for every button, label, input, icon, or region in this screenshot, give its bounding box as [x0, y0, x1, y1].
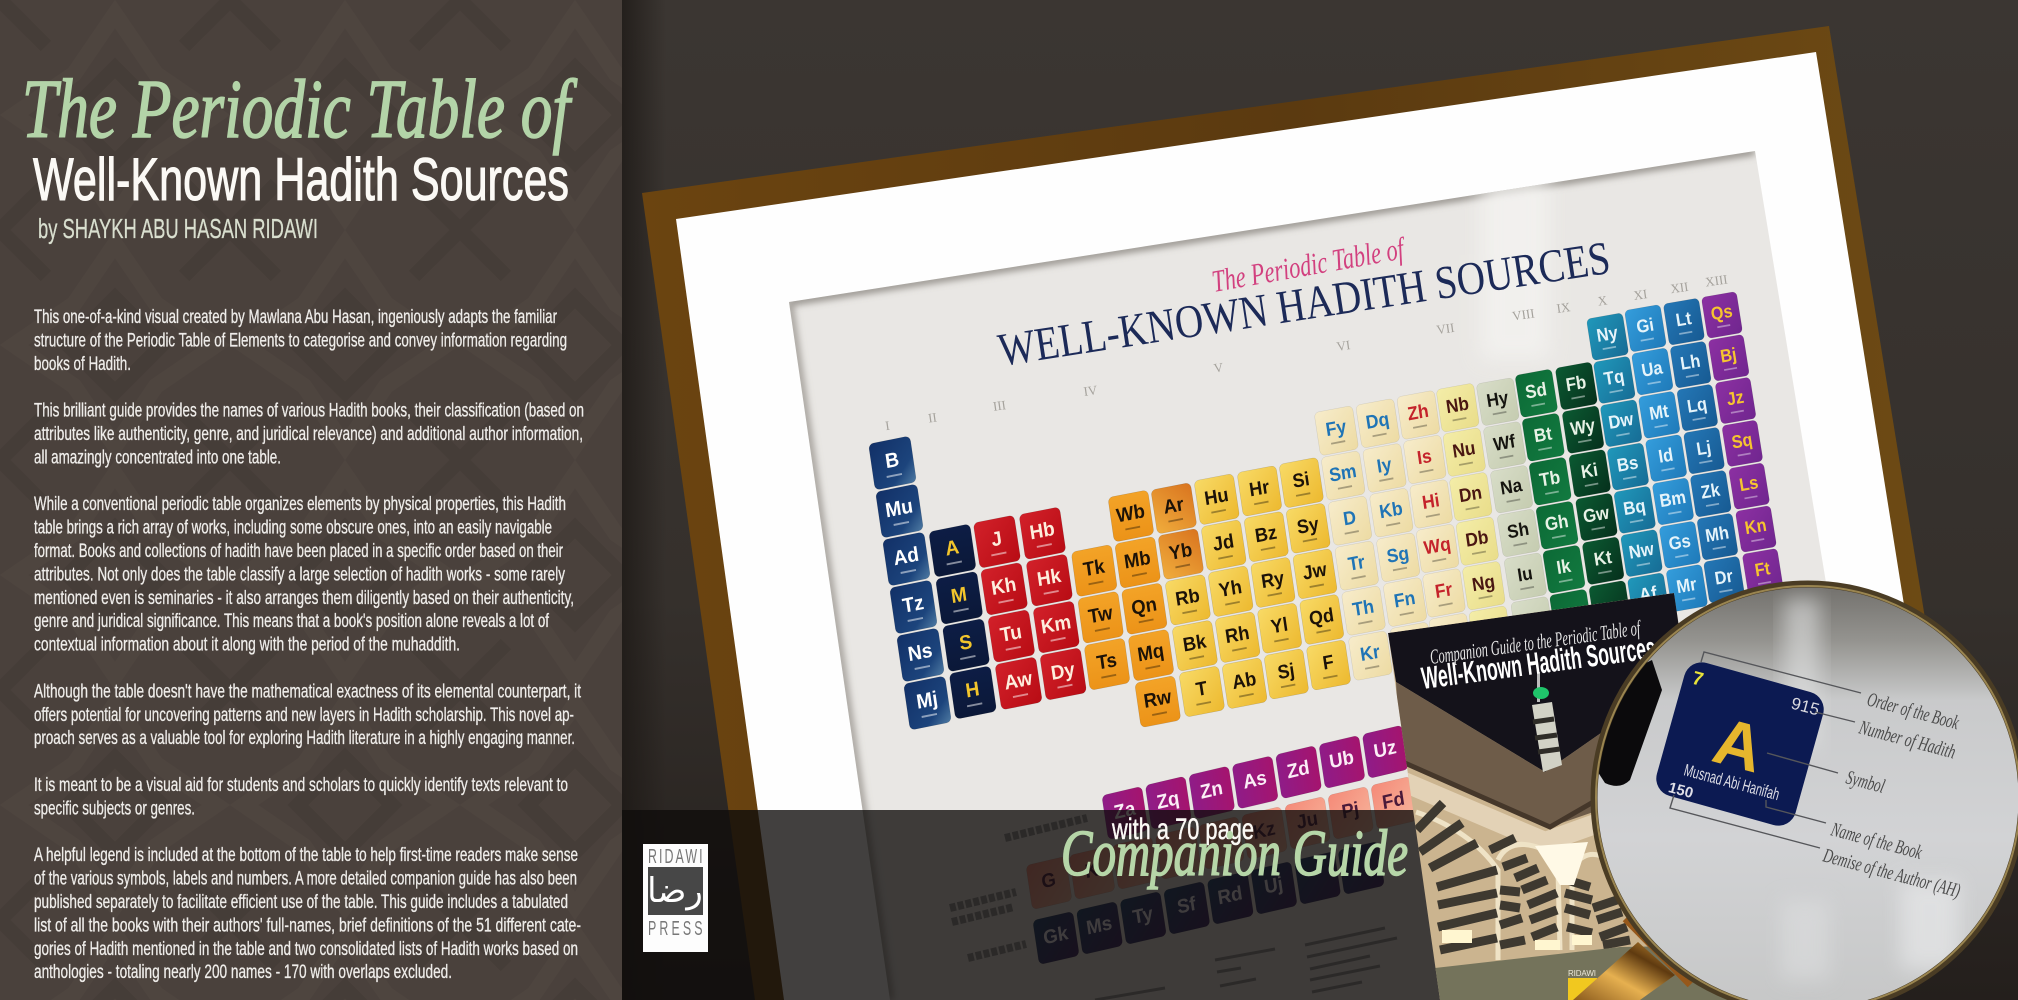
column numerals: VIII: [1511, 306, 1536, 324]
tile column XIX: Gi: [1635, 314, 1655, 337]
tile column II: M: [950, 583, 968, 608]
text block: description paragraphs: published separately to facilitate efficient use of the table. This guide includes a tabulated: [34, 891, 568, 913]
tile column XXI: Bj: [1719, 343, 1738, 367]
tile column X: F: [1321, 650, 1335, 674]
tile column XIII: Hi: [1421, 490, 1441, 513]
tile column XX: Zk: [1699, 479, 1722, 503]
tile column XV: Hy: [1485, 387, 1510, 411]
tile column V: Ts: [1095, 650, 1118, 675]
tile column XII: Sg: [1385, 541, 1410, 567]
tile row: navy series: Sf: [1176, 893, 1198, 919]
tile column III: Kh: [990, 573, 1018, 600]
tile column XI: Tr: [1346, 550, 1366, 575]
logo: Ridawi Press: [643, 844, 708, 952]
lens label: symbol: Symbol: [1844, 767, 1887, 798]
tile column XX: [1663, 298, 1745, 603]
text block: description paragraphs: of the various symbols, labels and numbers. A more detailed companion guide has also been: [34, 868, 577, 890]
logo: Ridawi Press: PRESS: [648, 917, 703, 940]
tile row: magenta series: As: [1242, 767, 1268, 794]
tile column XI: [1314, 406, 1393, 681]
tile row: navy series: Ty: [1131, 903, 1155, 929]
tile column XVI: Gh: [1543, 510, 1570, 535]
tile column XVIII: Bs: [1615, 452, 1640, 476]
tile column XIV: Ng: [1471, 571, 1496, 595]
lens tile: [1652, 658, 1828, 830]
text block: description paragraphs: list of all the books with their authors' full-names, brief definitions of the 51 different cate-: [34, 914, 581, 936]
book: companion guide: [1380, 590, 1740, 1000]
tile column XIV: Nb: [1445, 393, 1470, 417]
tile column II: S: [958, 631, 974, 655]
tile column V: Tw: [1087, 602, 1114, 629]
tile column XIV: Db: [1464, 526, 1490, 551]
tile column VIII: Yh: [1217, 576, 1243, 602]
tile column XXI: Sq: [1730, 428, 1754, 453]
tile column XXI: Ft: [1753, 557, 1772, 581]
tile column XI: Th: [1351, 595, 1375, 620]
book left arch arcs: [1415, 810, 1599, 960]
tile row: salmon series: K: [1084, 859, 1100, 883]
white mat: [676, 52, 1916, 1000]
tile column XIX: Gs: [1667, 530, 1692, 554]
tile column XX: Lh: [1679, 350, 1702, 374]
tile column IV: Km: [1039, 611, 1072, 639]
tile column I: Mu: [884, 495, 914, 523]
tile row: navy series: Gk: [1042, 923, 1070, 950]
column numerals: VI: [1336, 337, 1351, 354]
tile column XVIII: Tq: [1602, 365, 1626, 389]
book lamps: [1442, 930, 1592, 950]
column numerals: VII: [1435, 320, 1455, 337]
tile row: navy series: [1033, 841, 1385, 965]
band: dark strip across the bottom: [622, 810, 1502, 1000]
tile column XVII: Gw: [1582, 502, 1611, 527]
book bright centre: [1535, 842, 1588, 885]
text block: description paragraphs: specific subjects or genres.: [34, 797, 195, 819]
tile column XIX: Mr: [1675, 573, 1698, 597]
tile row: salmon series: Kz: [1252, 818, 1277, 844]
callout: Companion Guide: Companion Guide: [1061, 817, 1408, 890]
lens tile book name: Musnad Abi Hanifah: [1682, 761, 1782, 804]
tile column XX: Lt: [1674, 307, 1693, 331]
text block: description paragraphs: proach serves as a valuable tool for exploring Hadith literature in a highly engaging manner.: [34, 727, 575, 749]
text block: description paragraphs: While a conventional periodic table organizes elements by physical properties, this Hadith: [34, 493, 566, 515]
title: Well-Known Hadith Sources: Well-Known Hadith Sources: [33, 146, 569, 213]
tile column XII: Kb: [1378, 497, 1404, 523]
poster title: WELL-KNOWN HADITH SOURCES: [995, 232, 1614, 377]
tile column XI: Fy: [1324, 415, 1348, 440]
tile column VI: Mq: [1136, 640, 1165, 667]
tile column II: H: [964, 678, 981, 703]
tile column XXI: [1701, 291, 1784, 595]
tile column XIV: Dn: [1458, 482, 1483, 506]
tile column II: A: [944, 536, 961, 561]
column numerals: XII: [1669, 279, 1689, 296]
column numerals: XIII: [1704, 272, 1729, 290]
tile row: magenta series: Zd: [1286, 757, 1311, 784]
tile column XIX: [1624, 304, 1708, 612]
lens tile order number: 7: [1690, 668, 1705, 691]
book logo: [1568, 969, 1597, 1000]
tile column VII: Rb: [1174, 585, 1201, 611]
magnifier rim: [1594, 584, 2018, 1000]
tile column XX: Dr: [1713, 565, 1735, 589]
text block: description paragraphs: all amazingly concentrated into one table.: [34, 446, 281, 468]
tile column XVII: Fb: [1564, 371, 1588, 395]
tile column XII: Dq: [1364, 407, 1390, 433]
tile column XVIII: Dw: [1607, 408, 1635, 433]
text block: description paragraphs: A helpful legend is included at the bottom of the table to help first-time readers make sense: [34, 844, 578, 866]
tile column XV: Sh: [1506, 518, 1530, 543]
lens label: name: Name of the Book: [1828, 818, 1925, 864]
tile column XIV: Nu: [1451, 437, 1477, 462]
tile column XVI: Tb: [1538, 466, 1562, 491]
panel: left description column: [0, 0, 666, 1000]
logo: Ridawi Press: RIDAWI: [648, 845, 703, 868]
tile row: magenta series: [1102, 725, 1409, 840]
tile column X: Qd: [1308, 603, 1335, 630]
book base photo tone: [1388, 593, 1678, 1000]
tile column XVIII: [1586, 313, 1670, 621]
tile column IX: Sj: [1276, 659, 1296, 683]
tile column XXI: Ls: [1738, 471, 1760, 495]
book cream beam: [1404, 782, 1640, 842]
tile column I: Tz: [901, 591, 925, 618]
text block: description paragraphs: [34, 306, 584, 983]
tile column VI: Rw: [1142, 686, 1173, 713]
tile column VI: Qn: [1130, 594, 1158, 620]
text block: description paragraphs: anthologies - totaling nearly 200 names - 170 with overlaps excluded.: [34, 961, 452, 983]
tile column XXI: Jz: [1725, 386, 1745, 410]
tile column IV: Dy: [1049, 658, 1077, 685]
tile column XI: Sm: [1328, 459, 1358, 486]
tile column IV: Hb: [1028, 517, 1056, 545]
tile column I: Mj: [915, 687, 939, 714]
tile column X: [1279, 457, 1351, 691]
tile column VII: Ar: [1162, 494, 1186, 519]
text block: description paragraphs: It is meant to be a visual aid for students and scholars to quickly identify texts relevant to: [34, 774, 568, 796]
tile column IX: Hr: [1248, 475, 1271, 501]
tile row: magenta series: Uz: [1372, 737, 1398, 763]
tile row: salmon series: G: [1040, 869, 1057, 893]
tile row: magenta series: Ub: [1328, 747, 1355, 774]
tile column IV: [1019, 507, 1087, 700]
poster inner shadow: [789, 151, 1755, 1000]
tile column XV: Na: [1499, 474, 1525, 499]
tile column X: Sy: [1295, 512, 1321, 538]
book black upper cover: [1388, 593, 1700, 772]
tile column IX: Ry: [1260, 566, 1286, 592]
title: The Periodic Table of: The Periodic Table of: [22, 63, 578, 156]
book logo: RIDAWI: [1568, 969, 1596, 978]
column numerals: IV: [1083, 382, 1099, 399]
column numerals: X: [1597, 292, 1609, 309]
tile column VIII: [1194, 473, 1268, 709]
magnifier handle: [1573, 917, 1692, 1000]
tile row: salmon series: [1026, 776, 1417, 910]
poster sheet: [789, 151, 1842, 1000]
tile column III: J: [990, 527, 1004, 552]
tile column XIX: Mt: [1648, 400, 1670, 424]
text block: description paragraphs: structure of the Periodic Table of Elements to categorise and convey information regarding: [34, 329, 567, 351]
tile column XVI: Bt: [1532, 423, 1553, 447]
tile column XXI: Kn: [1743, 514, 1768, 538]
tile row: navy series: Ms: [1085, 913, 1114, 940]
tile column XVIII: Nw: [1627, 538, 1655, 563]
tile column XIII: Is: [1416, 445, 1433, 469]
text block: description paragraphs: gories of Hadith mentioned in the table and two consolidated lists of Hadith works based on: [34, 938, 578, 960]
tile column VIII: Rh: [1224, 622, 1251, 648]
tile column IX: Yl: [1269, 613, 1289, 638]
book arch stripes: [1417, 803, 1630, 950]
text block: description paragraphs: offers potential for uncovering patterns and new layers in Hadith scholarship. This novel ap-: [34, 704, 574, 726]
text block: description paragraphs: books of Hadith.: [34, 353, 131, 375]
tile column XX: Lj: [1695, 436, 1712, 460]
tile column III: Aw: [1003, 667, 1035, 695]
byline: by SHAYKH ABU HASAN RIDAWI: [38, 213, 318, 244]
tile column XIX: Ua: [1640, 357, 1664, 381]
tile column XII: [1356, 398, 1434, 672]
tile column XV: Iu: [1516, 562, 1534, 586]
tile row: salmon series: Ju: [1295, 808, 1319, 834]
book title script: Companion Guide to the Periodic Table of: [1428, 615, 1643, 669]
column numerals: II: [927, 410, 938, 426]
tile column XV: Wf: [1492, 431, 1517, 455]
text block: description paragraphs: genre and juridical significance. This means that a book's position alone reveals a lot of: [34, 610, 549, 632]
column numerals: V: [1213, 359, 1225, 376]
text block: description paragraphs: This one-of-a-kind visual created by Mawlana Abu Hasan, ingeniously adapts the familiar: [34, 306, 557, 328]
tile column VII: [1151, 482, 1225, 717]
tile column II: [929, 524, 997, 719]
tile column XI: D: [1342, 506, 1357, 530]
tile column XV: [1476, 377, 1554, 645]
text block: description paragraphs: table brings a rich array of works, including some obscure ones, into an easily navigable: [34, 517, 552, 539]
tile column XVII: [1555, 362, 1631, 629]
tile column X: Si: [1291, 467, 1311, 492]
tile column XIII: Fr: [1434, 579, 1454, 602]
logo: Ridawi Press: رضا: [647, 871, 703, 911]
tile column VIII: Jd: [1211, 531, 1236, 556]
tile column VI: Mb: [1123, 547, 1152, 574]
text block: description paragraphs: Although the table doesn't have the mathematical exactness of its elemental counterpart, it: [34, 680, 581, 702]
tile column XII: Fn: [1392, 586, 1417, 612]
book olive lower panel: [1435, 945, 1740, 1000]
lens label: number: Number of Hadith: [1856, 716, 1958, 763]
text block: description paragraphs: attributes like authenticity, genre, and juridical relevance) and additional author information,: [34, 423, 583, 445]
lens leader lines: [1670, 652, 1861, 848]
text block: description paragraphs: attributes. Not only does the table classify a large selection of hadith works - some rarely: [34, 563, 565, 585]
tile column XVIII: Ny: [1595, 322, 1620, 346]
tile column XVI: [1515, 369, 1593, 638]
tile column III: [973, 515, 1042, 710]
tile column XVIII: Bq: [1622, 495, 1647, 519]
text block: description paragraphs: contextual information about it along with the period of the muhaddith.: [34, 634, 460, 656]
lens tile symbol: A: [1706, 703, 1771, 787]
column numerals: I: [884, 418, 891, 433]
tile column XVII: Wy: [1569, 414, 1597, 440]
lens label: order: Order of the Book: [1865, 689, 1962, 734]
tile column XIII: Zh: [1406, 400, 1430, 425]
column numerals: [884, 272, 1729, 433]
tile column V: Tk: [1082, 556, 1106, 582]
tile column XVII: Ki: [1580, 459, 1599, 483]
book stone cornice: [1396, 682, 1600, 824]
tile column XX: Lq: [1685, 393, 1708, 417]
tile column III: Tu: [999, 620, 1023, 647]
tile column XI: Kr: [1359, 640, 1381, 665]
tile row: magenta series: Zq: [1155, 788, 1181, 814]
tile column XIII: Wq: [1422, 533, 1452, 559]
book beam shadow line: [1406, 761, 1591, 830]
lens tile hadith count: 915: [1789, 694, 1821, 719]
tile column I: [868, 436, 952, 730]
callout: with a 70 page: with a 70 page: [1111, 813, 1254, 846]
tile column XIV: [1436, 383, 1512, 655]
tile column XX: Mh: [1704, 521, 1730, 546]
text block: description paragraphs: mentioned even is seminaries - it also arranges them diligently based on their authenticity,: [34, 587, 574, 609]
text block: description paragraphs: format. Books and collections of hadith have been placed in a specific order based on their: [34, 540, 563, 562]
tile column I: Ns: [906, 639, 934, 666]
book title: Well-Known Hadith Sources: [1419, 630, 1658, 696]
tile column XVIII: Af: [1638, 582, 1658, 606]
column numerals: XI: [1633, 286, 1648, 303]
column numerals: IX: [1556, 299, 1572, 316]
tile column VII: Bk: [1181, 631, 1208, 657]
tile column XVII: Kt: [1592, 546, 1613, 570]
column numerals: III: [992, 397, 1007, 414]
tile column VII: Yb: [1167, 539, 1194, 565]
lens refraction shadow: [1598, 660, 1662, 786]
tile column XXI: Qs: [1709, 300, 1734, 324]
tile column VIII: Ab: [1231, 668, 1258, 694]
tile column VI: [1108, 490, 1181, 728]
lens tile demise year: 150: [1666, 779, 1695, 802]
tile column XIX: Bm: [1658, 486, 1687, 511]
tile column VIII: Hu: [1203, 484, 1230, 510]
tile column XVI: Ik: [1555, 555, 1572, 578]
tile column XII: Iy: [1375, 453, 1394, 477]
tile column IX: Bz: [1253, 521, 1278, 547]
magnifier lens: [1590, 580, 2018, 1000]
tile row: salmon series: Pj: [1340, 798, 1361, 824]
tile row: magenta series: Zn: [1199, 778, 1224, 804]
tile column IX: [1237, 465, 1309, 700]
poster legend lines: [950, 818, 1397, 1000]
tile column XIII: [1397, 390, 1472, 662]
tile column X: Jw: [1301, 558, 1328, 584]
tile column IV: Hk: [1036, 564, 1063, 591]
tile column I: Ad: [892, 543, 920, 570]
book minaret: [1532, 672, 1562, 772]
tile column VI: Wb: [1115, 501, 1146, 528]
tile column I: B: [884, 448, 901, 473]
tile row: salmon series: Fd: [1381, 788, 1406, 814]
tile column V: [1071, 544, 1130, 690]
tile column XVI: Sd: [1524, 378, 1548, 403]
poster title script: The Periodic Table of: [1209, 230, 1409, 299]
wooden picture frame: [642, 26, 1935, 1000]
tile row: navy series: Uj: [1263, 873, 1284, 899]
tile row: magenta series: Za: [1112, 798, 1137, 824]
text block: description paragraphs: This brilliant guide provides the names of various Hadith books, their classification (based on: [34, 400, 584, 422]
tile column XIX: Id: [1657, 444, 1675, 467]
tile row: navy series: Rd: [1216, 883, 1244, 910]
tile column VII: T: [1194, 678, 1209, 701]
